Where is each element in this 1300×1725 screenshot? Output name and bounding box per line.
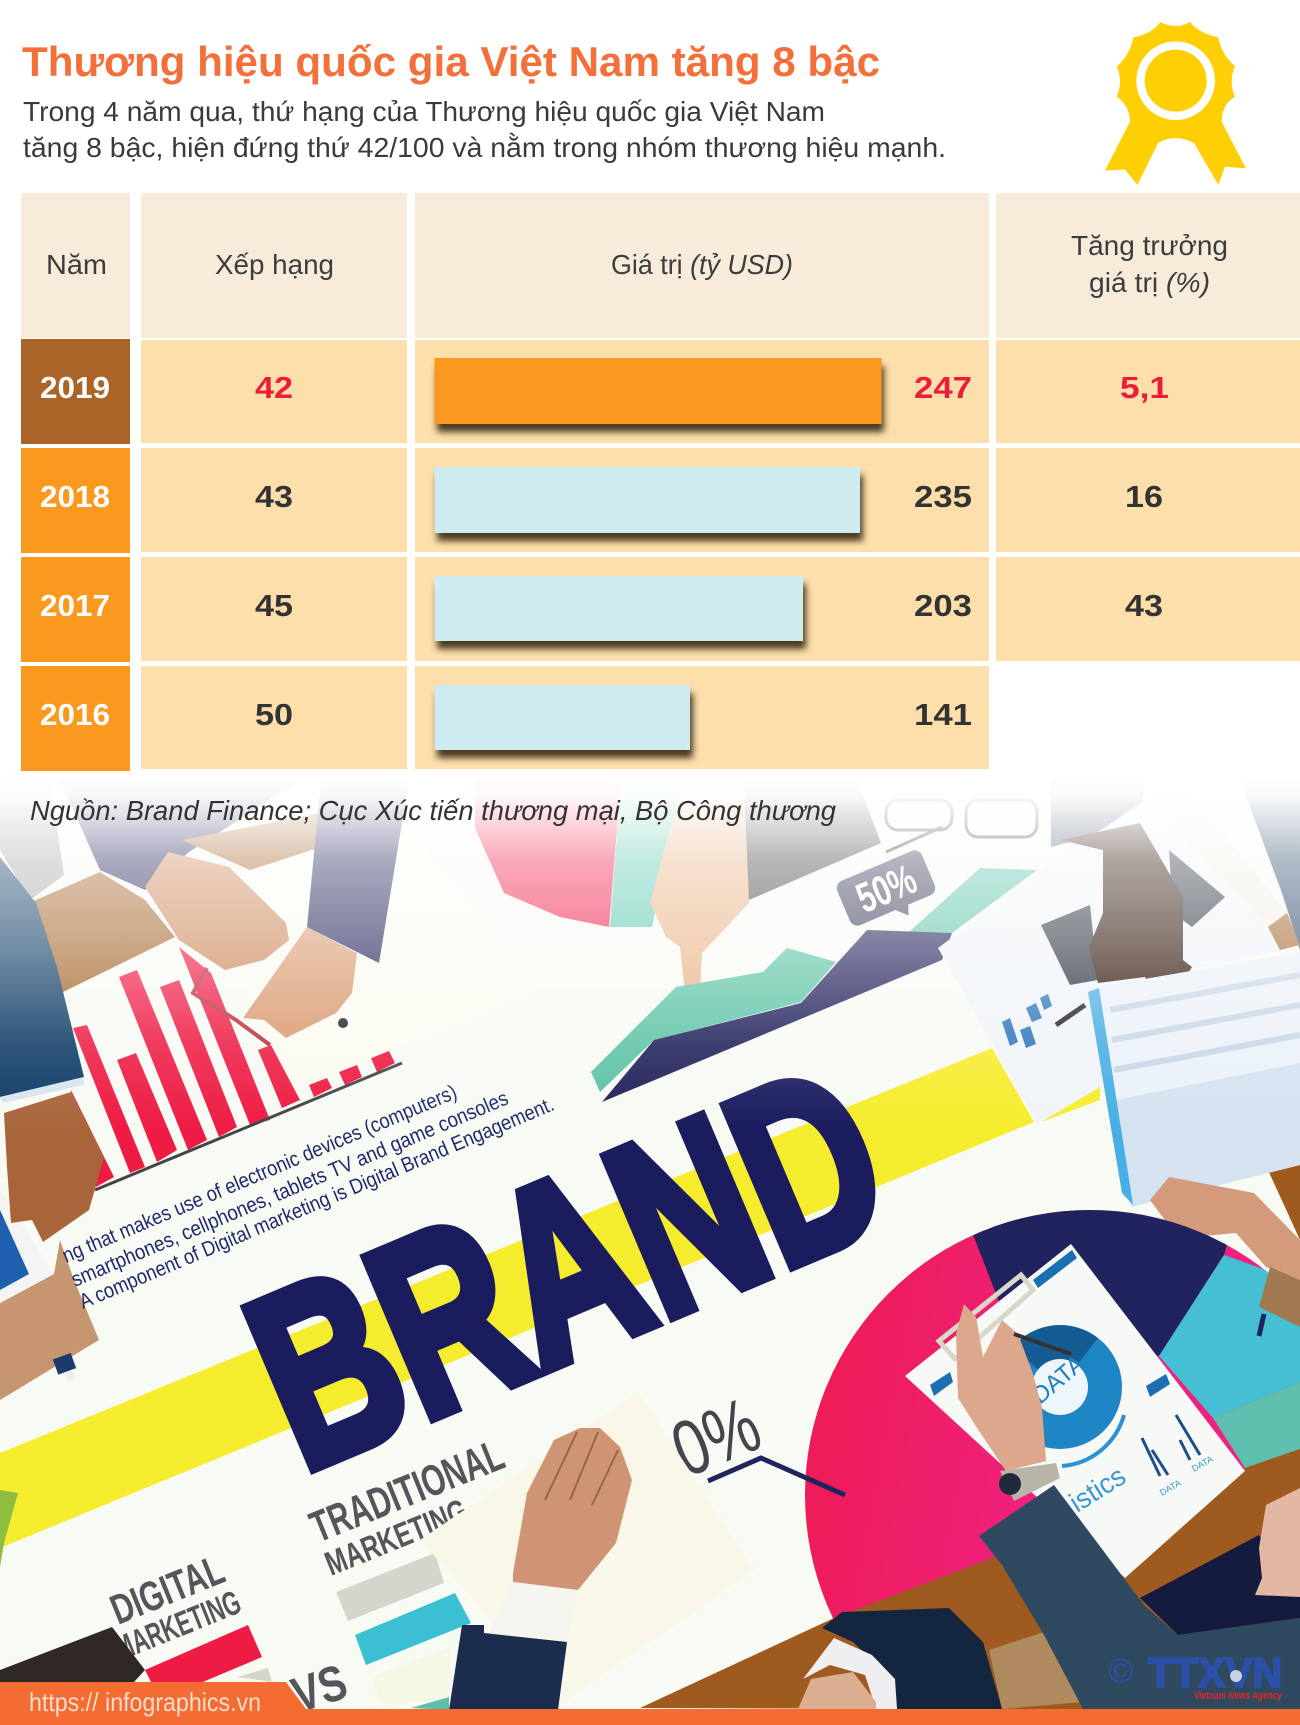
title: Thương hiệu quốc gia Việt Nam tăng 8 bậc xyxy=(22,38,880,85)
comparison bars xyxy=(145,1553,471,1710)
pie top xyxy=(475,796,678,927)
row 2017: 45 xyxy=(255,588,293,623)
watch xyxy=(999,1463,1060,1501)
row 2019: 2019 xyxy=(40,370,110,405)
digital marketing labels xyxy=(109,1558,346,1709)
row 2017: 43 xyxy=(1125,588,1163,623)
traditional marketing labels xyxy=(307,1443,506,1576)
footer url: https:// infographics.vn xyxy=(29,1687,261,1717)
row 2018: 2018 xyxy=(40,479,110,514)
small descriptive text: smartphones, cellphones, tablets TV and game consoles xyxy=(68,1087,512,1292)
documents top right xyxy=(938,802,1300,1048)
hand on notebook xyxy=(513,1428,632,1590)
hand with pen xyxy=(956,1304,1071,1471)
notebook top xyxy=(271,1045,381,1085)
white fade over photo xyxy=(0,770,1300,1130)
plant edge xyxy=(0,1490,18,1567)
subtitle: Trong 4 năm qua, thứ hạng của Thương hiệu quốc gia Việt Nam xyxy=(23,96,825,127)
top right background xyxy=(1051,780,1300,950)
panel: data table xyxy=(21,193,1300,771)
digital marketing labels: DIGITAL xyxy=(104,1546,231,1633)
table header: Năm xyxy=(46,249,107,280)
row 2018: 235 xyxy=(914,479,972,514)
row 2018: 43 xyxy=(255,479,293,514)
man at bottom xyxy=(798,1608,1002,1709)
row 2019 xyxy=(21,339,1300,444)
traditional marketing labels: TRADITIONAL xyxy=(303,1430,511,1552)
TTXVN logo: TTXVN xyxy=(1148,1649,1282,1696)
clipboard with donut chart: istics xyxy=(1064,1460,1131,1518)
row 2018 xyxy=(21,448,1300,553)
subtitle: tăng 8 bậc, hiện đứng thứ 42/100 và nằm trong nhóm thương hiệu mạnh. xyxy=(23,132,946,163)
cuff and sleeve top left xyxy=(0,808,64,898)
wood right xyxy=(1268,1163,1300,1240)
clipboard with donut chart: DATA xyxy=(1158,1478,1183,1498)
data sheet right xyxy=(1088,952,1300,1207)
big BRAND word: BRAND xyxy=(214,1011,921,1521)
TTXVN logo: © xyxy=(1108,1652,1133,1690)
row 2016 xyxy=(21,666,989,771)
suit sleeve right xyxy=(979,1485,1300,1709)
row 2016: 50 xyxy=(255,697,293,732)
subtitle xyxy=(23,96,946,163)
icon: medal ribbon xyxy=(1105,22,1246,185)
mountain chart xyxy=(591,868,1037,1102)
big pie chart xyxy=(805,1210,1300,1618)
row 2019: 42 xyxy=(255,370,293,405)
row 2016: 2016 xyxy=(40,697,110,732)
row 2018: 16 xyxy=(1125,479,1163,514)
percent text: 0% xyxy=(659,1380,772,1494)
table header: Xếp hạng xyxy=(215,249,334,280)
notebook bottom xyxy=(420,1392,755,1702)
right hand xyxy=(1255,1488,1300,1597)
suit jacket left xyxy=(0,857,84,1097)
TTXVN logo xyxy=(1108,1649,1283,1702)
digital marketing labels: MARKETING xyxy=(109,1583,246,1668)
row 2019: 247 xyxy=(914,370,972,405)
table header xyxy=(21,193,1300,338)
wood corner top left xyxy=(29,813,321,993)
source note: Nguồn: Brand Finance; Cục Xúc tiến thương mại, Bộ Công thương xyxy=(30,795,836,826)
left hand, tablet, envelope xyxy=(0,1092,104,1400)
lower right clothes xyxy=(989,1535,1300,1709)
table header: Giá trị (tỷ USD) xyxy=(611,249,793,280)
footer bar xyxy=(0,1682,1300,1725)
navy sleeve top xyxy=(307,796,406,963)
tablet and glasses top xyxy=(745,798,1038,900)
row 2017 xyxy=(21,557,1300,662)
red glasses cord xyxy=(193,968,270,1045)
sleeve tan right xyxy=(1259,1267,1300,1336)
background photo: brand meeting table xyxy=(0,770,1300,1725)
traditional marketing labels: MARKETING xyxy=(320,1492,473,1583)
small descriptive text: A component of Digital marketing is Digital Brand Engagement. xyxy=(76,1093,558,1314)
laptop xyxy=(0,1627,145,1682)
table header: giá trị (%) xyxy=(1089,267,1210,298)
clipboard with donut chart: DATA xyxy=(1190,1454,1215,1474)
yellow band xyxy=(0,1048,1100,1548)
row 2017: 203 xyxy=(914,588,972,623)
digital marketing labels: VS xyxy=(285,1654,354,1723)
cuff and sleeve xyxy=(449,1582,578,1710)
clipboard with donut chart: DATA xyxy=(1027,1350,1090,1410)
table header: Tăng trưởng xyxy=(1071,230,1228,261)
wood table bottom right xyxy=(640,1449,1300,1710)
pointing hand xyxy=(650,798,749,986)
hand under data sheet xyxy=(1150,1177,1300,1280)
row 2017: 2017 xyxy=(40,588,110,623)
small descriptive text: ng that makes use of electronic devices (computers) xyxy=(59,1081,460,1268)
row 2016: 141 xyxy=(914,697,972,732)
50 percent tag: 50% xyxy=(849,855,923,922)
hands top xyxy=(145,852,357,1038)
row 2019: 5,1 xyxy=(1120,370,1169,405)
clipboard with donut chart xyxy=(905,1244,1245,1578)
red bar chart xyxy=(71,947,402,1190)
brown hand xyxy=(1060,823,1192,1000)
